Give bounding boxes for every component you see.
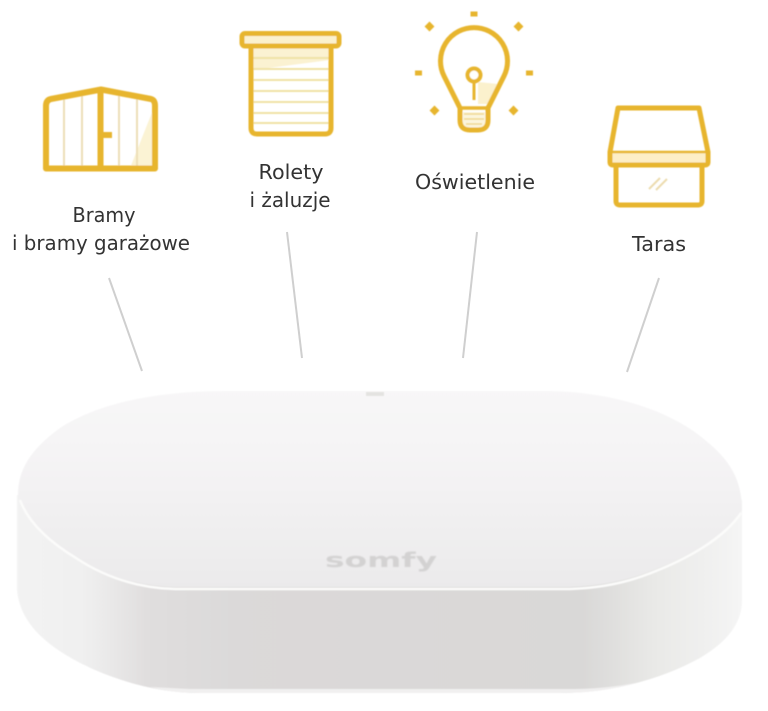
label: blinds: Rolety <box>258 160 324 184</box>
logo: somfy: somfy <box>325 548 437 572</box>
label: gates <box>12 203 190 255</box>
icon: light bulb <box>415 12 533 130</box>
label: terrace: Taras <box>631 232 686 256</box>
label: gates: i bramy garażowe <box>12 231 190 255</box>
label: lighting: Oświetlenie <box>415 170 535 194</box>
label: blinds <box>250 160 330 212</box>
icon: roller blind <box>242 34 339 134</box>
icon: terrace awning <box>610 108 708 205</box>
smart box device <box>17 391 742 693</box>
label: blinds: i żaluzje <box>250 188 330 212</box>
label: gates: Bramy <box>72 203 136 227</box>
icon: garage gate <box>46 90 155 168</box>
indicator light <box>366 392 384 396</box>
device body <box>17 495 742 693</box>
device lid <box>18 391 742 587</box>
connector lines <box>109 232 659 372</box>
